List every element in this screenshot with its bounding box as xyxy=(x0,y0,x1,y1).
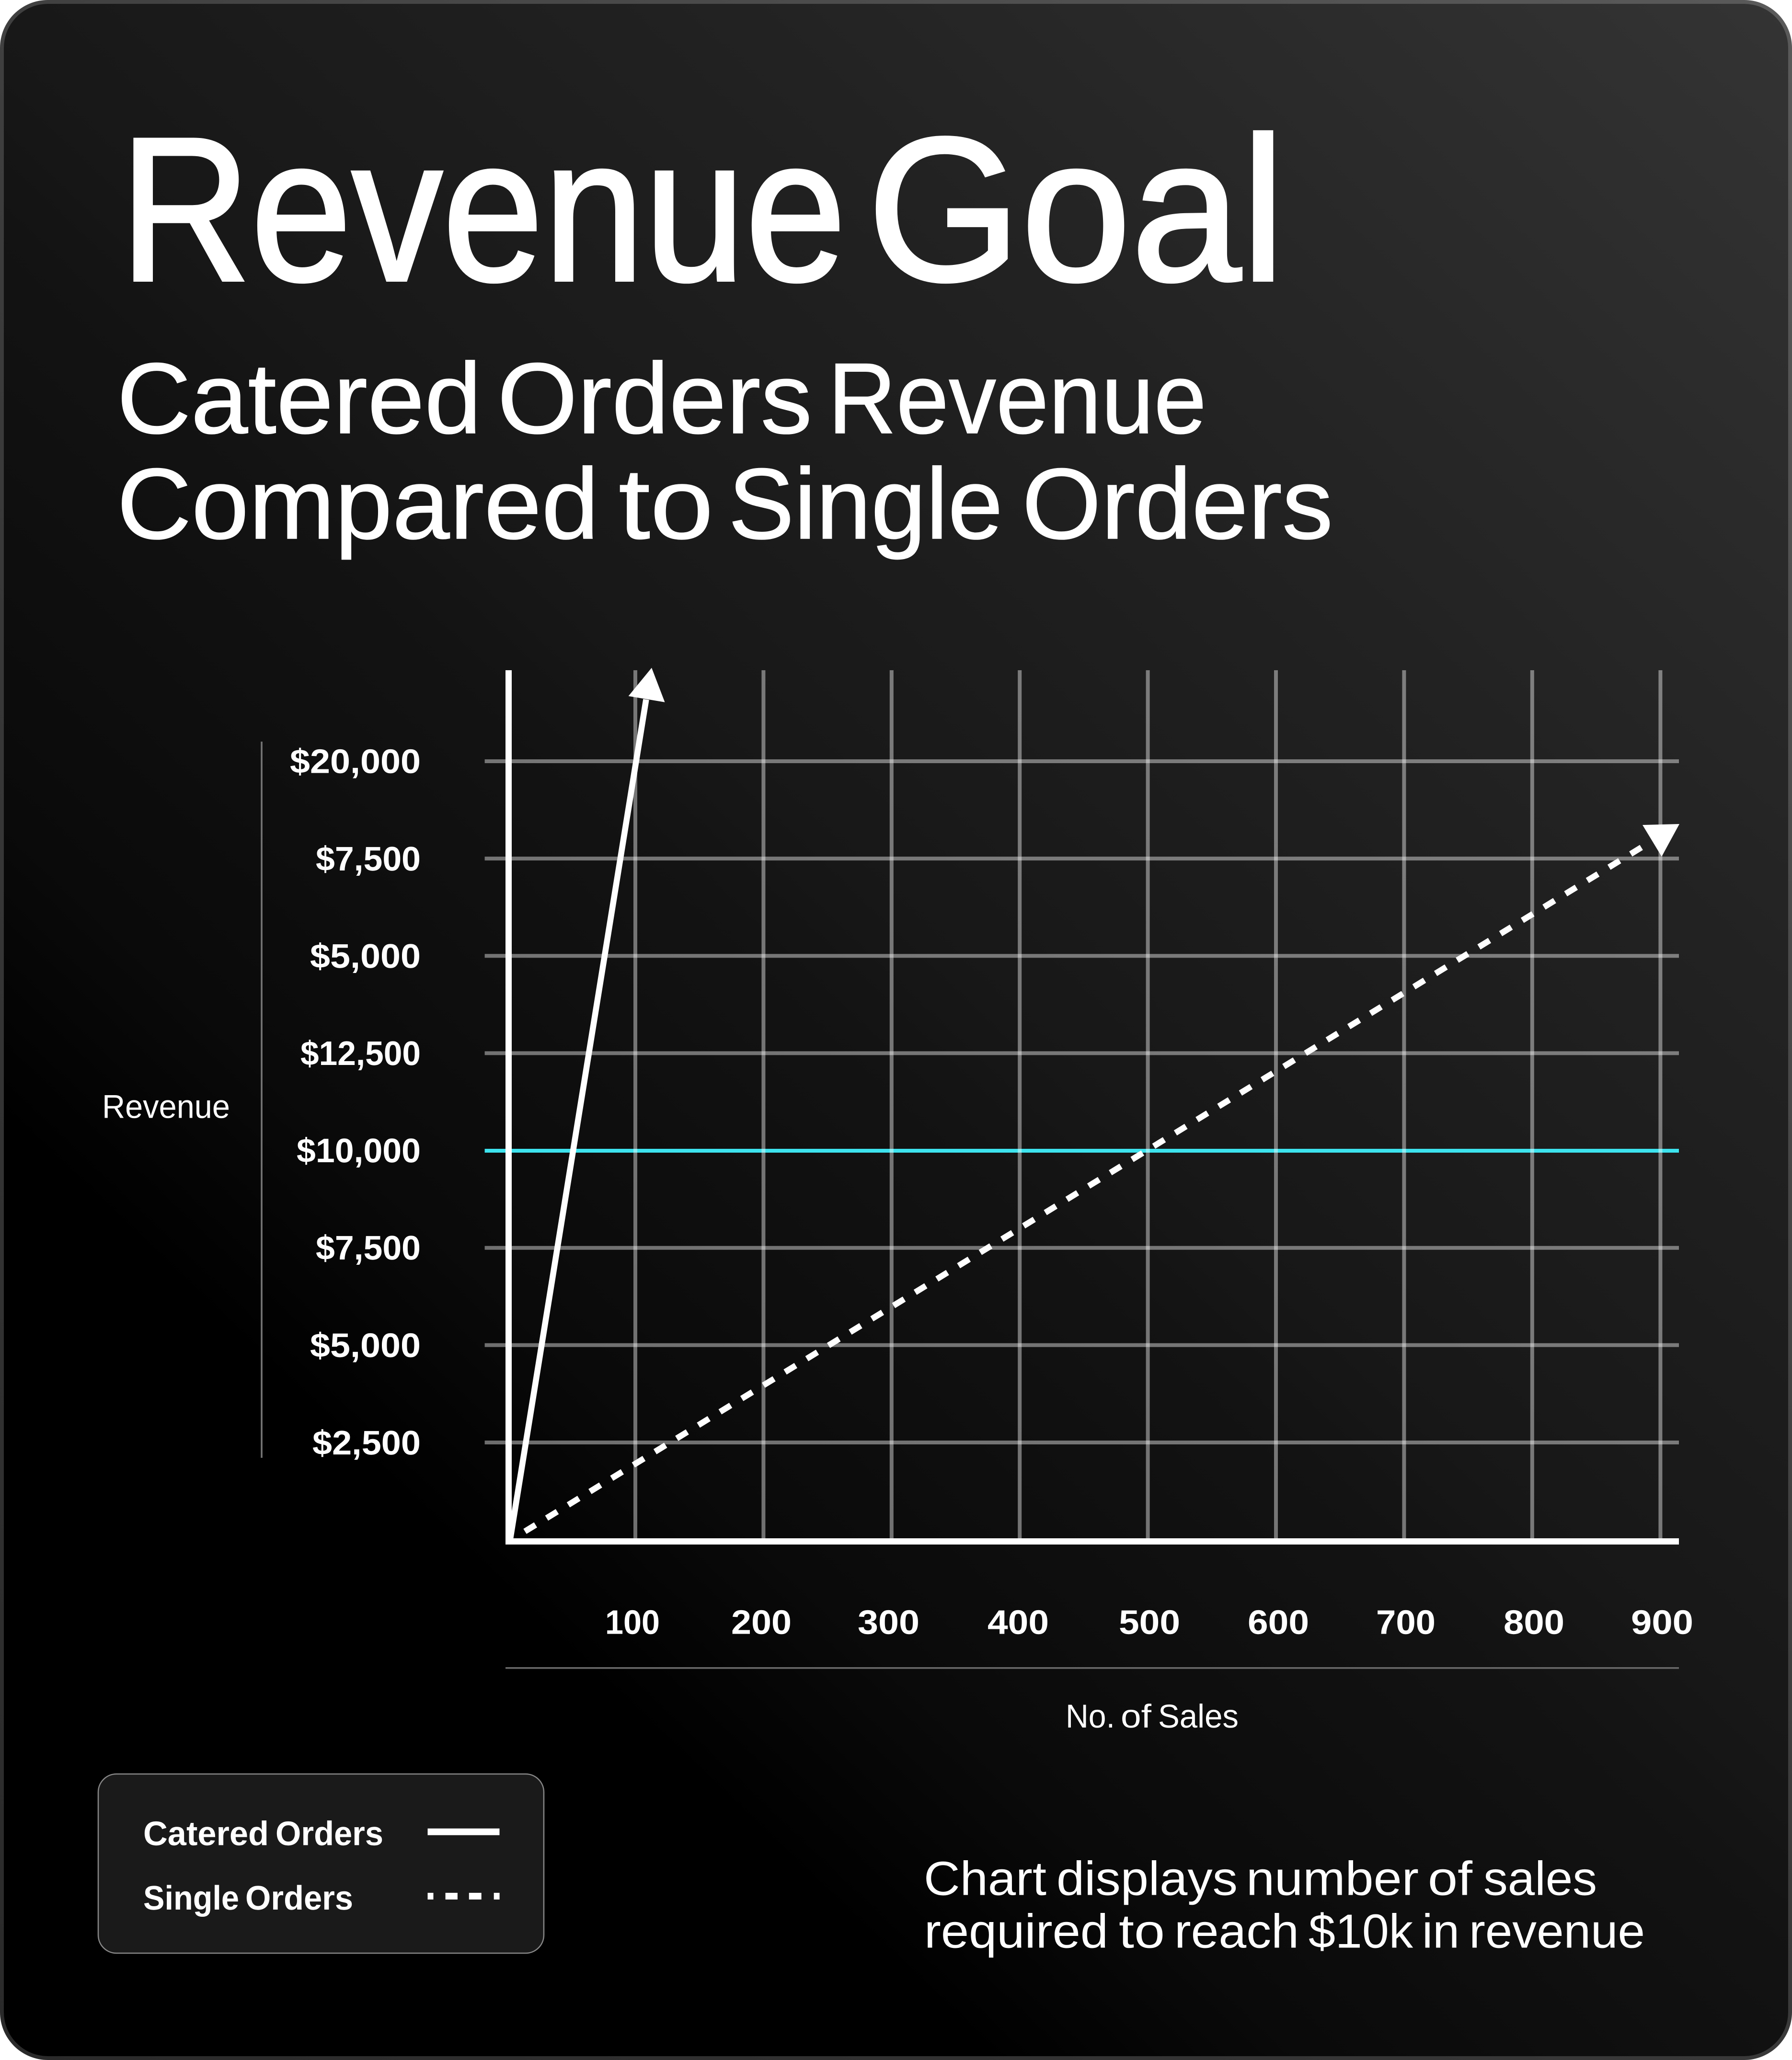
note text: required xyxy=(924,1904,1108,1958)
subtitle: Orders xyxy=(497,342,812,455)
x axis values: 700 xyxy=(1376,1604,1436,1642)
x axis values xyxy=(605,1604,1693,1642)
subtitle: Single xyxy=(728,447,1003,560)
x axis values: 200 xyxy=(731,1604,792,1642)
note text: $10k xyxy=(1309,1904,1413,1958)
x axis values: 900 xyxy=(1631,1604,1693,1642)
legend: catered orders: Orders xyxy=(276,1815,383,1853)
subtitle: to xyxy=(619,447,713,560)
axes xyxy=(505,670,1679,1545)
x axis values: 600 xyxy=(1248,1604,1309,1642)
y axis values: $7,500 xyxy=(316,840,421,878)
note text: in xyxy=(1422,1904,1459,1958)
title: Revenue xyxy=(120,95,846,324)
y axis values: $5,000 xyxy=(310,1327,421,1364)
subtitle xyxy=(117,342,1333,560)
y axis values: $10,000 xyxy=(297,1132,421,1170)
y axis values: $12,500 xyxy=(300,1035,421,1073)
x axis label: of xyxy=(1121,1698,1152,1735)
line chart xyxy=(485,668,1679,1545)
note text: revenue xyxy=(1469,1904,1645,1958)
subtitle: Compared xyxy=(117,447,599,560)
subtitle: Orders xyxy=(1022,447,1333,560)
legend: catered orders: Catered xyxy=(143,1815,269,1853)
note text xyxy=(924,1852,1645,1958)
note text: sales xyxy=(1483,1852,1597,1906)
y axis values: $20,000 xyxy=(290,743,421,781)
legend: catered orders xyxy=(143,1815,499,1853)
note text: to xyxy=(1119,1904,1165,1958)
note text: Chart xyxy=(924,1852,1046,1906)
y axis values xyxy=(290,743,421,1462)
subtitle: Catered xyxy=(117,342,482,455)
y axis label: Revenue xyxy=(102,1088,230,1125)
arrow: single orders xyxy=(525,824,1679,1532)
x axis values: 800 xyxy=(1504,1604,1564,1642)
note text: of xyxy=(1428,1852,1472,1906)
legend: single orders: Orders xyxy=(245,1879,353,1917)
x axis values: 300 xyxy=(858,1604,919,1642)
subtitle: Revenue xyxy=(828,342,1206,455)
note text: number xyxy=(1246,1852,1419,1906)
x axis rule xyxy=(505,1667,1679,1669)
y axis values: $5,000 xyxy=(310,938,421,975)
x axis label: Sales xyxy=(1158,1698,1239,1735)
note text: reach xyxy=(1174,1904,1299,1958)
y axis values: $7,500 xyxy=(316,1229,421,1267)
arrow: catered orders xyxy=(510,668,665,1540)
x axis label: No. xyxy=(1066,1698,1115,1735)
note text: displays xyxy=(1057,1852,1238,1906)
$10k goal line xyxy=(485,1149,1679,1153)
title: Goal xyxy=(867,95,1285,324)
y axis values: $2,500 xyxy=(312,1424,421,1462)
y axis rule xyxy=(261,742,263,1458)
x axis values: 500 xyxy=(1119,1604,1180,1642)
legend: single orders xyxy=(143,1879,500,1917)
x axis values: 400 xyxy=(988,1604,1049,1642)
panel: legend xyxy=(98,1774,544,1953)
legend: single orders: Single xyxy=(143,1879,239,1917)
x axis values: 100 xyxy=(605,1604,660,1642)
x axis label xyxy=(1066,1698,1239,1735)
